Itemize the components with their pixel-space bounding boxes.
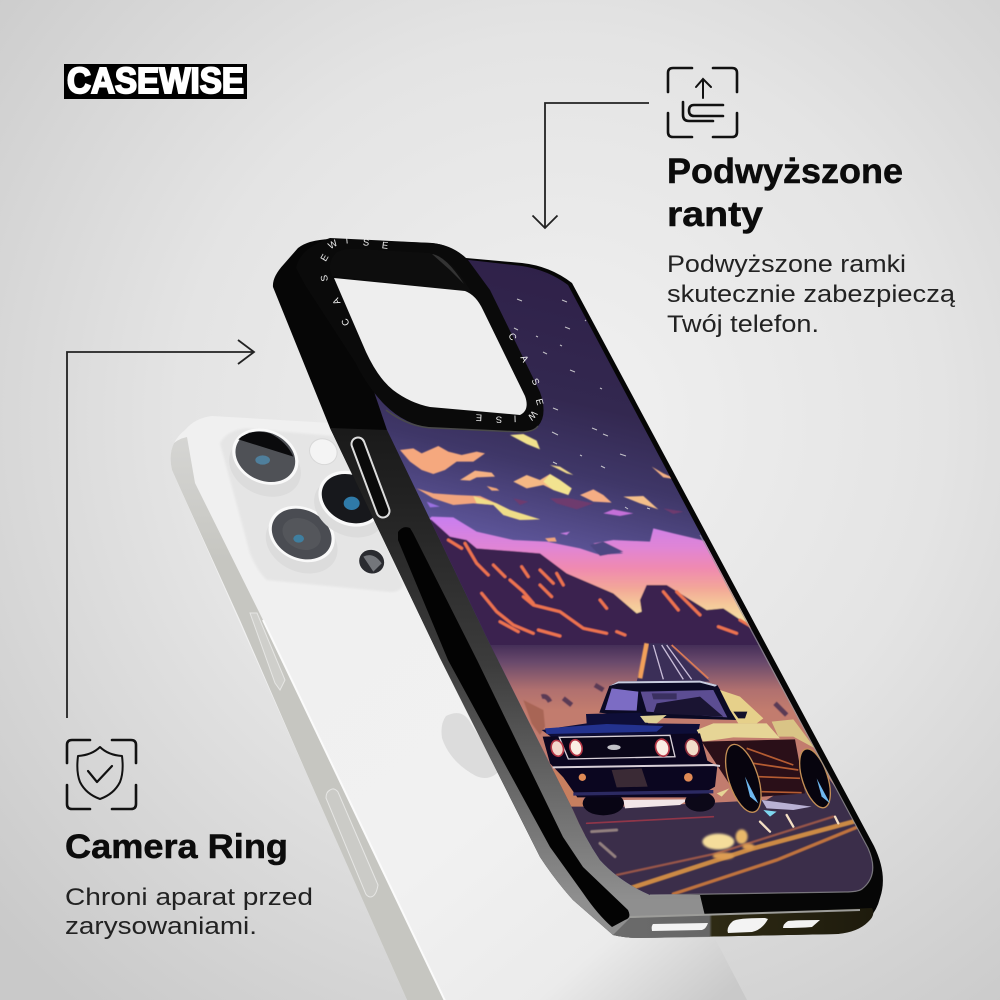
- stars: [514, 299, 650, 509]
- camera ring: black ring with CASEWISE lettering: S: [362, 237, 370, 249]
- camera ring: black ring with CASEWISE lettering: E: [476, 411, 482, 423]
- text: camera ring description: Chroni aparat przed: [65, 884, 313, 911]
- camera ring: black ring with CASEWISE lettering: [296, 235, 545, 432]
- camera ring: black ring with CASEWISE lettering: E: [533, 398, 545, 406]
- text: raised edges description: Podwyższone ramki: [667, 251, 906, 278]
- bottom lip of case: [613, 908, 873, 938]
- camera ring: black ring with CASEWISE lettering: E: [381, 240, 389, 252]
- camera ring: black ring with CASEWISE lettering: W: [326, 238, 340, 252]
- arrow: raised edges pointer: [532, 103, 649, 228]
- wet asphalt road: [554, 771, 872, 895]
- sky clouds and mountains: [400, 434, 783, 660]
- icon: raised edges: [668, 68, 737, 137]
- phone case: black frame: [273, 239, 883, 938]
- sensor: [355, 546, 388, 578]
- lens right: [304, 460, 396, 549]
- roof and windscreen frame: [599, 681, 737, 720]
- heading: Podwyższone ranty: Podwyższone: [667, 152, 903, 191]
- side button upper: [250, 613, 285, 690]
- rear and side cream panels: [697, 723, 780, 742]
- camera ring: black ring with CASEWISE lettering: A: [330, 295, 343, 306]
- text: camera ring description: [65, 884, 313, 940]
- camera ring: black ring with CASEWISE lettering: S: [319, 274, 331, 282]
- road reflections: [623, 799, 688, 808]
- long side slot: [398, 527, 629, 927]
- case artwork: sunset road: [374, 260, 873, 895]
- distant mountains: [430, 518, 760, 660]
- text: raised edges description: skutecznie zabezpieczą: [667, 281, 955, 308]
- camera plateau: [219, 418, 403, 592]
- camera ring: black ring with CASEWISE lettering: S: [529, 377, 541, 387]
- heading: Podwyższone ranty: ranty: [667, 195, 764, 234]
- number plate: [612, 768, 648, 787]
- camera ring: black ring with CASEWISE lettering: A: [518, 354, 531, 365]
- text: camera ring description: zarysowaniami.: [65, 913, 257, 940]
- tyres: [582, 797, 624, 816]
- hood: [542, 713, 700, 738]
- lens bottom: [256, 495, 347, 585]
- arrow: camera ring pointer: [67, 340, 254, 718]
- camera ring: black ring with CASEWISE lettering: S: [496, 414, 502, 424]
- camera ring: black ring with CASEWISE lettering: W: [525, 408, 539, 422]
- camera ring: black ring with CASEWISE lettering: C: [340, 316, 352, 327]
- side window: [720, 690, 763, 723]
- camera ring: black ring with CASEWISE lettering: E: [319, 253, 331, 263]
- side button lower: [326, 789, 378, 897]
- plains and road: [491, 645, 861, 835]
- heading: Camera Ring: Camera Ring: [65, 828, 288, 866]
- camera ring: black ring with CASEWISE lettering: I: [513, 412, 517, 424]
- text: raised edges description: [667, 251, 955, 338]
- front face: [543, 733, 717, 797]
- lower translucent frame: [330, 428, 710, 938]
- flash: [305, 434, 341, 469]
- camera ring: black ring with CASEWISE lettering: C: [506, 331, 519, 343]
- camera ring: black ring with CASEWISE lettering: I: [345, 235, 349, 247]
- light streaks: [587, 815, 857, 894]
- icon: shield with check: [67, 740, 136, 809]
- front side wheel: [724, 744, 762, 813]
- hole showing background: [334, 278, 527, 415]
- text: raised edges description: Twój telefon.: [667, 311, 819, 338]
- heading: Podwyższone ranty: [667, 152, 903, 234]
- side window with white outline: [358, 444, 383, 511]
- lens top left: [219, 418, 311, 508]
- logo: CASEWISE: CASEWISE: [67, 60, 244, 101]
- white phone body: [165, 416, 747, 1000]
- rear side wheel: [799, 748, 831, 808]
- speaker holes: [652, 923, 708, 931]
- apple logo: [442, 713, 500, 778]
- art edge highlight: [650, 535, 873, 895]
- lower side: [702, 739, 805, 797]
- headlights: [550, 740, 564, 758]
- mustang car: [542, 681, 837, 817]
- phone side band: [165, 437, 447, 1000]
